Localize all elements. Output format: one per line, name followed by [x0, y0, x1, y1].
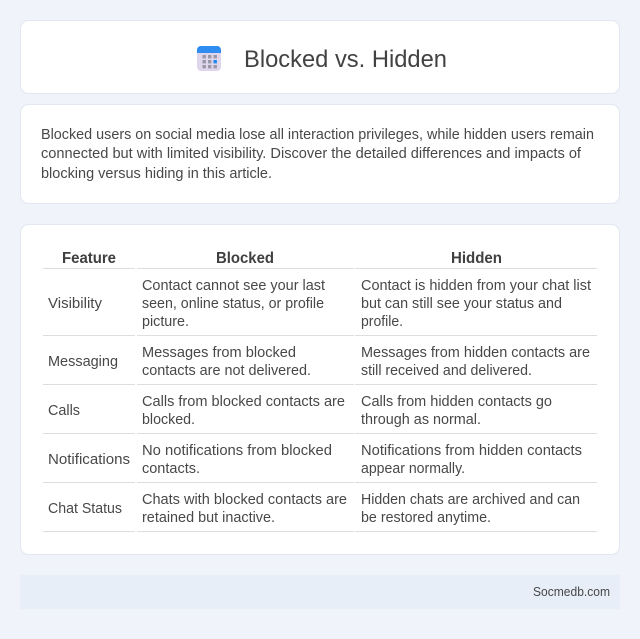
table header row: Feature [62, 250, 116, 267]
table row: Messaging: contacts are not delivered. [142, 363, 311, 379]
table row: Messaging: Messages from blocked [142, 345, 296, 361]
icon: calendar [197, 46, 221, 71]
table row: Notifications [48, 443, 582, 477]
table row: Chat Status: retained but inactive. [142, 510, 275, 526]
panel: introduction [20, 104, 620, 204]
table row: Visibility: Visibility [48, 296, 103, 312]
table row: Notifications: contacts. [142, 461, 200, 477]
table row: Messaging: Messages from hidden contacts are [361, 345, 590, 361]
table row: Messaging: Messaging [48, 354, 118, 370]
table row: Chat Status: Chat Status [48, 501, 122, 517]
table row: Messaging [48, 345, 590, 379]
table row: Chat Status: be restored anytime. [361, 510, 491, 526]
panel: comparison table [20, 224, 620, 554]
table row: Messaging: still received and delivered. [361, 363, 532, 379]
table row: Calls: blocked. [142, 412, 195, 428]
table row: Calls: Calls [48, 403, 80, 419]
table row: Notifications: No notifications from blocked [142, 443, 332, 459]
table row: Notifications: Notifications from hidden contacts [361, 443, 582, 459]
table row: Visibility: seen, online status, or profile [142, 296, 324, 312]
table row: Chat Status: Hidden chats are archived and can [361, 492, 580, 508]
table row: Calls: through as normal. [361, 412, 481, 428]
table header row: Blocked [216, 250, 274, 267]
text block: introduction: blocking versus hiding in this article. [41, 166, 272, 182]
table row: Visibility: Contact cannot see your last [142, 278, 325, 294]
table row: Visibility: profile. [361, 314, 403, 330]
footer text: site name: Socmedb.com [533, 585, 610, 599]
table header row: Hidden [451, 250, 502, 267]
table row: Visibility: but can still see your status and [361, 296, 562, 312]
title: Blocked vs. Hidden [244, 46, 447, 73]
panel: header [20, 20, 620, 94]
table row: Notifications: Notifications [48, 452, 130, 468]
text block: introduction: Blocked users on social media lose all interaction privileges, while hidden users remain [41, 127, 594, 143]
table row: Chat Status: Chats with blocked contacts are [142, 492, 347, 508]
table row: Calls: Calls from blocked contacts are [142, 394, 345, 410]
table row: Notifications: appear normally. [361, 461, 465, 477]
text block: introduction [41, 127, 594, 182]
table row: Chat Status [48, 492, 580, 526]
table row: Visibility: picture. [142, 314, 189, 330]
table row: Visibility [48, 278, 591, 330]
text block: introduction: connected but with limited visibility. Discover the detailed differences and impacts of [41, 146, 582, 162]
footer [20, 575, 620, 609]
table row: Calls: Calls from hidden contacts go [361, 394, 552, 410]
table row: Calls [48, 394, 552, 428]
table header row [62, 250, 502, 267]
table row: Visibility: Contact is hidden from your chat list [361, 278, 591, 294]
